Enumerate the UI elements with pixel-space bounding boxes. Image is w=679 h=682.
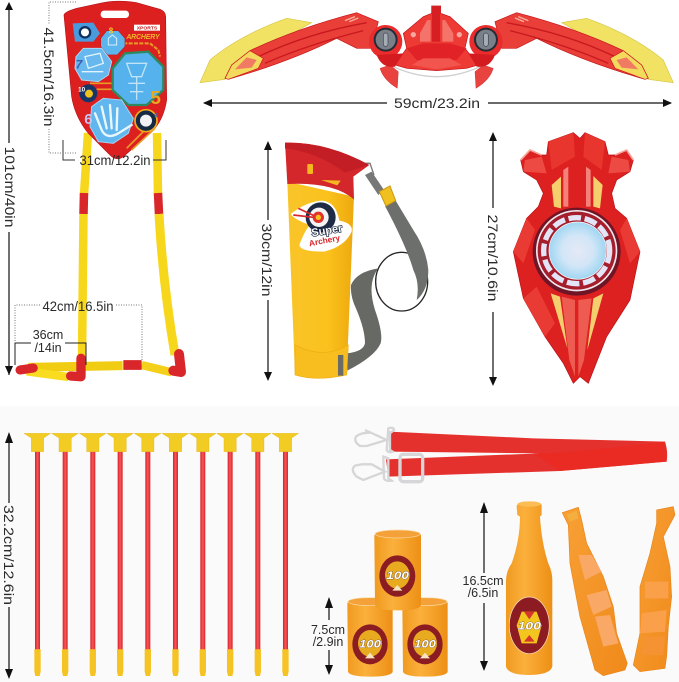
arrow 3: [79, 433, 106, 676]
dimension: overall stand height: [2, 2, 18, 375]
arrow 10: [272, 433, 299, 676]
arm guard: [513, 133, 640, 383]
dimension: board width: [63, 140, 166, 168]
quiver badge: Super: [311, 223, 344, 239]
dimension: base depth: /14in: [34, 341, 62, 355]
dimension: can height: 7.5cm: [311, 623, 345, 637]
plastic bottle: 100: [518, 620, 541, 632]
dimension: arrow length: [1, 432, 17, 679]
dimension: base width: [15, 298, 142, 360]
dimension: base width: 42cm/16.5in: [42, 298, 114, 314]
bow grip centre: [369, 6, 503, 88]
dimension: base depth: [15, 328, 86, 365]
strap buckle: [379, 186, 396, 206]
dimension: bottle height: 16.5cm: [462, 574, 504, 588]
bow string: [387, 63, 487, 77]
brand label: ARCHERY: [125, 34, 161, 41]
can top: 100: [386, 570, 409, 582]
panel: score 8: 8: [109, 26, 114, 35]
panel: score 6 with hand: [84, 98, 133, 143]
dimension: can height: /2.9in: [313, 635, 343, 649]
dimension: can height: [311, 597, 345, 675]
dimension: guard height: 27cm/10.6in: [485, 214, 501, 302]
panel: score 6 with hand: 6: [84, 112, 92, 128]
dimension: bow width: 59cm/23.2in: [394, 95, 480, 111]
ten suction arrows: [24, 433, 299, 676]
icon: score 10: [78, 84, 97, 102]
arrow 7: [189, 433, 216, 676]
icon: score 10: 10: [78, 87, 86, 94]
can left: 100: [359, 638, 381, 650]
brand label: [125, 25, 161, 41]
arc reactor: [533, 208, 621, 296]
icon: score 9 gear: 9: [154, 112, 158, 119]
panel: score 7: [75, 48, 112, 82]
dimension: arrow length: 32.2cm/12.6in: [1, 505, 17, 605]
panel: score 5: 5: [150, 87, 161, 108]
arrow 2: [52, 433, 78, 676]
stacked tin cans: [347, 501, 675, 677]
bottle half: left: [562, 507, 627, 676]
icon: score 9 gear: [135, 110, 158, 132]
dimension: quiver height: [259, 141, 275, 381]
bow left limb: [200, 13, 378, 83]
quiver body: [287, 182, 354, 378]
brand label: XPORTS: [137, 25, 158, 31]
quiver badge: [291, 201, 352, 252]
dimension: overall stand height: 101cm/40in: [2, 146, 18, 228]
quiver badge: Archery: [308, 232, 341, 248]
icon: top-left badge: [73, 23, 100, 42]
quiver: [285, 143, 428, 378]
arrow 6: [162, 433, 189, 676]
dimension: board width: 31cm/12.2in: [80, 152, 150, 168]
arrow 1: [24, 433, 51, 676]
red bow strap: [353, 428, 667, 482]
arrow 4: [107, 433, 133, 676]
bottle half: right: [633, 507, 675, 672]
dimension: bottle height: /6.5in: [468, 586, 498, 600]
dimension: guard height: [485, 132, 501, 386]
target board: [64, 1, 167, 159]
bow right limb: [495, 13, 673, 83]
can left: [347, 598, 393, 677]
panel: score 5: [113, 52, 163, 108]
strap clips and buckle: [353, 428, 423, 482]
dimension: quiver height: 30cm/12in: [259, 224, 275, 296]
background: lower section: [0, 406, 679, 682]
can top: [374, 530, 421, 610]
dimension: board height: [41, 2, 76, 153]
arrow 5: [134, 433, 161, 676]
plastic bottle: [506, 501, 552, 675]
target stand legs and base: [20, 133, 181, 377]
panel: score 7: 7: [76, 57, 84, 71]
can right: [402, 598, 448, 677]
dimension: bottle height: [462, 502, 504, 671]
quiver strap: [347, 163, 428, 371]
bow: [200, 6, 673, 88]
dimension: base depth: 36cm: [33, 328, 63, 342]
can right: 100: [414, 638, 436, 650]
arrow 9: [244, 433, 271, 676]
handle: [101, 11, 129, 18]
arrow 8: [217, 433, 243, 676]
dimension: board height: 41.5cm/16.3in: [41, 27, 57, 127]
dimension: bow width: [203, 95, 672, 111]
panel: score 8: [101, 26, 125, 55]
quiver red top: [285, 143, 369, 199]
